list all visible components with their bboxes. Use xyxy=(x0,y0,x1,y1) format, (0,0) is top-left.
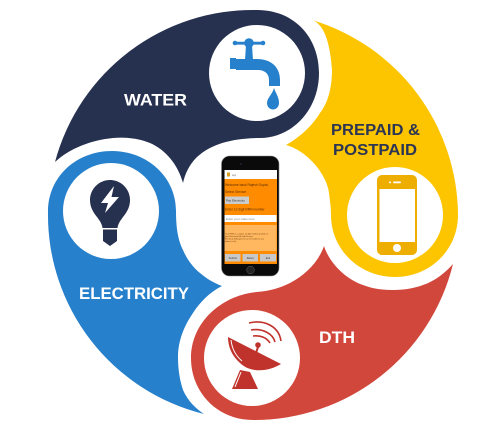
phone screen: Enter 12 digit RRN number xyxy=(225,208,265,212)
phone screen: district in Fiji. xyxy=(225,240,237,243)
phone screen: your Electricity Bill and Receipt. xyxy=(225,235,253,238)
phone screen: Enter your value here xyxy=(226,217,255,221)
panel: water xyxy=(55,10,319,183)
phone screen: Select Service xyxy=(225,190,246,194)
label: electricity: ELECTRICITY xyxy=(79,285,189,303)
phone screen: Welcome back Rajesh Gupta, xyxy=(225,183,269,187)
phone screen: Submit xyxy=(229,256,237,260)
phone screen: Pay Electricity xyxy=(226,198,245,202)
phone screen xyxy=(224,170,277,264)
phone screen: Exit xyxy=(266,256,270,260)
label: water: WATER xyxy=(124,90,187,110)
phone screen: Your RRN is a unique 12 digit number printed on xyxy=(225,232,268,236)
panel: electricity xyxy=(48,151,222,414)
label: prepaid and postpaid xyxy=(331,122,420,159)
label: DTH: DTH xyxy=(319,329,355,347)
central phone xyxy=(222,156,279,276)
label: prepaid and postpaid: POSTPAID xyxy=(333,142,417,159)
phone screen: Electricity Bill payment can be made for any xyxy=(225,238,264,240)
panel: DTH xyxy=(191,246,453,420)
icon: faucet xyxy=(230,38,280,110)
icon: smartphone xyxy=(377,175,417,255)
phone screen: app xyxy=(232,174,237,177)
phone screen: Reset xyxy=(247,256,254,260)
icon: light bulb xyxy=(90,180,130,246)
icon: satellite dish xyxy=(228,322,281,389)
panel: prepaid and postpaid xyxy=(286,20,458,277)
label: prepaid and postpaid: PREPAID & xyxy=(331,122,420,139)
